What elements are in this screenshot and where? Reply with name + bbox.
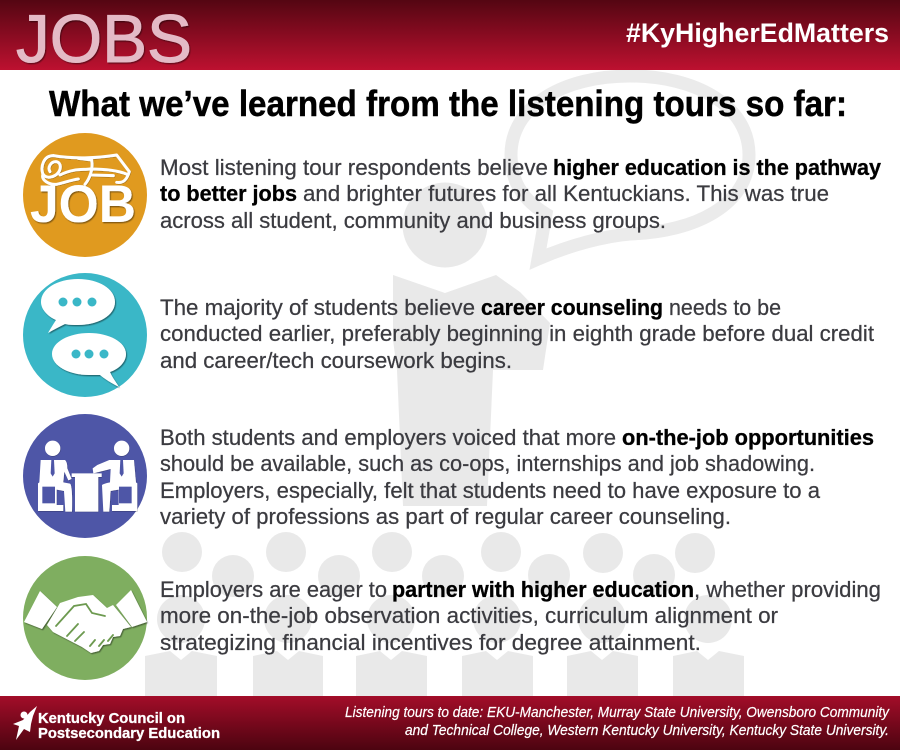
text block: career counseling: conducted earlier, preferably beginning in eighth grade before dual credit	[160, 321, 874, 346]
text block: on-the-job opportunities: Both students and employers voiced that more	[160, 425, 616, 450]
logo: Kentucky Council on Postsecondary Education	[13, 706, 220, 742]
text block: partner with higher education: strategizing financial incentives for degree attainment.	[160, 630, 701, 655]
footer banner	[0, 696, 900, 750]
heading: JOBS: JOBS	[16, 1, 192, 77]
text block: higher education pathway	[160, 155, 882, 233]
title: What we’ve learned from the listening tours so far:	[49, 83, 847, 124]
text block: on-the-job opportunities: Employers, especially, felt that students need to have exposure to a	[160, 478, 821, 503]
text block: higher education pathway: and brighter futures for all Kentuckians. This was true	[303, 181, 829, 206]
text block: career counseling: needs to be	[669, 295, 781, 320]
text block: partner with higher education: partner with higher education	[392, 577, 694, 602]
text block: partner with higher education: , whether providing	[694, 577, 881, 602]
text block: higher education pathway: higher education is the pathway	[553, 155, 882, 180]
icon: job scroll: JOB	[30, 175, 136, 234]
text block: partner with higher education	[160, 577, 881, 655]
background: speech bubble outline	[511, 76, 749, 259]
text block: partner with higher education: Employers are eager to	[160, 577, 387, 602]
text block: higher education pathway: Most listening tour respondents believe	[160, 155, 548, 180]
text block: career counseling	[160, 295, 874, 373]
icon: handshake	[23, 556, 147, 680]
background: large standing person	[393, 182, 550, 506]
text block: career counseling: and career/tech coursework begins.	[160, 348, 512, 373]
text block: career counseling: The majority of students believe	[160, 295, 475, 320]
text block: higher education pathway: to better jobs	[160, 181, 297, 206]
icon: job scroll	[23, 133, 147, 257]
text block: on-the-job opportunities: on-the-job opportunities	[622, 425, 874, 450]
background: crowd of people	[145, 532, 744, 696]
text block: partner with higher education: more on-the-job observation activities, curriculum alignment or	[160, 603, 778, 628]
icon: speech bubbles	[23, 273, 147, 397]
footnote: listening tours to date	[345, 705, 890, 739]
hashtag: #KyHigherEdMatters	[626, 18, 889, 48]
logo: Kentucky Council on Postsecondary Education: Postsecondary Education	[38, 726, 220, 742]
text block: on-the-job opportunities	[160, 425, 874, 529]
icon: two people at a desk	[23, 414, 147, 538]
text block: higher education pathway: across all student, community and business groups.	[160, 208, 666, 233]
header banner	[0, 0, 900, 77]
logo: Kentucky Council on Postsecondary Education: Kentucky Council on	[38, 711, 185, 727]
text block: on-the-job opportunities: should be available, such as co-ops, internships and job shadowing.	[160, 451, 815, 476]
text block: career counseling: career counseling	[481, 295, 663, 320]
text block: on-the-job opportunities: variety of professions as part of regular career counseling.	[160, 504, 731, 529]
